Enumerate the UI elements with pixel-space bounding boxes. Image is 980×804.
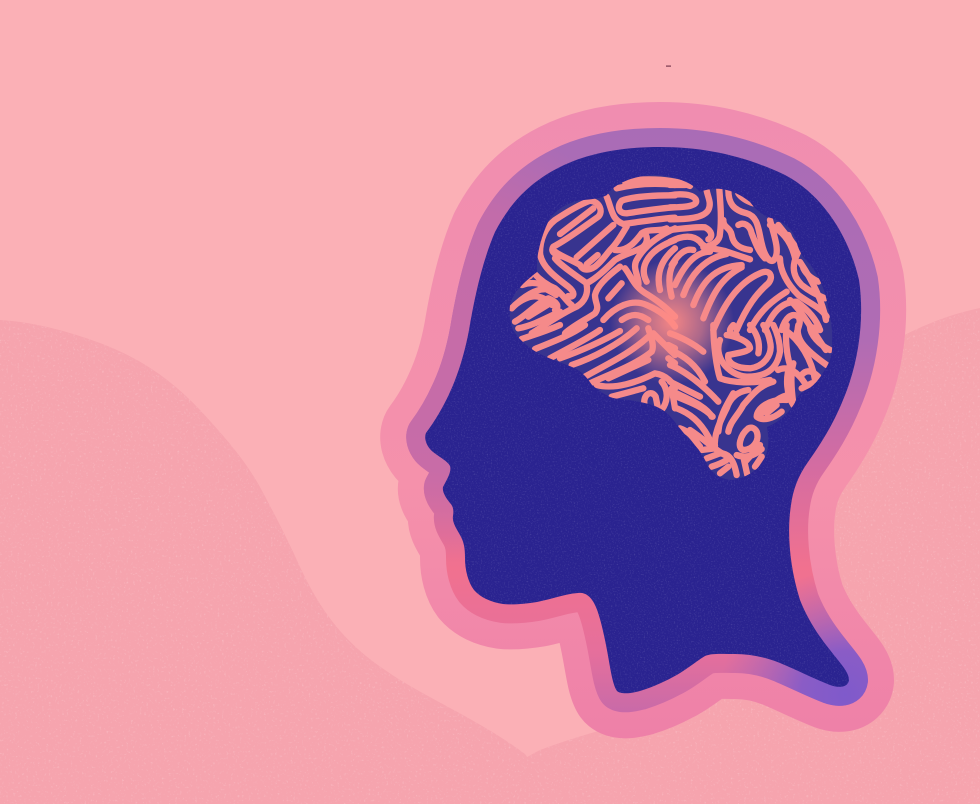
brain: central glow	[610, 260, 734, 384]
brain folds: upper right	[670, 185, 827, 333]
mark: small speck above head	[666, 66, 671, 67]
head: navy silhouette	[425, 147, 861, 693]
brain folds: gap fillers along the edge	[515, 179, 826, 462]
brain folds: lower left	[522, 325, 675, 410]
brain folds: lower right	[670, 325, 830, 475]
hill: left textured	[0, 320, 560, 804]
hill: right textured	[470, 308, 980, 804]
brain folds: upper left	[512, 184, 675, 333]
head: middle purple ring	[425, 147, 861, 693]
brain: maze pattern	[510, 175, 832, 480]
head: outer pink halo	[425, 147, 861, 693]
